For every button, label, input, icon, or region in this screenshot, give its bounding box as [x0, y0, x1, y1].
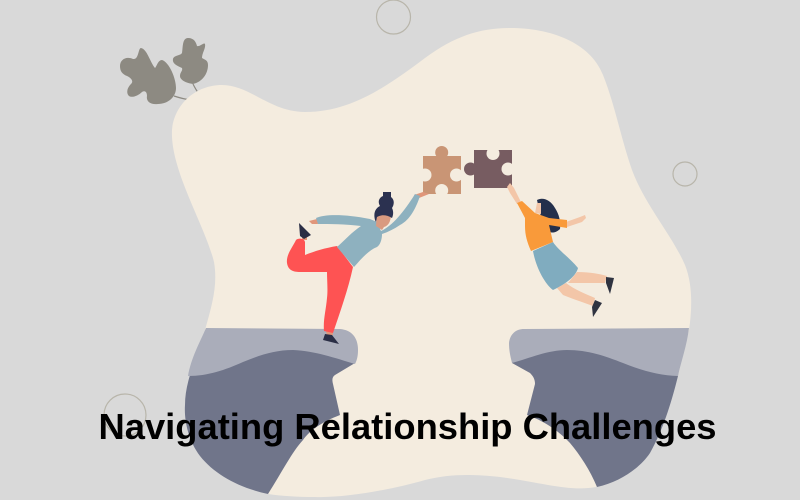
- figure: woman balancing on left cliff: [287, 192, 429, 344]
- pants: [287, 239, 353, 333]
- left cliff: [185, 328, 358, 494]
- shoe: standing foot: [323, 334, 339, 344]
- shirt: [316, 194, 420, 267]
- hair: [537, 199, 560, 233]
- legs skin: [557, 272, 607, 306]
- orange top: [517, 201, 567, 251]
- face: [535, 203, 541, 214]
- background blob: [172, 28, 691, 497]
- circle outline: bottom left: [104, 394, 146, 436]
- hand and arm skin: [302, 192, 429, 335]
- puzzle piece: tan: [418, 146, 463, 197]
- arms skin: [507, 183, 586, 227]
- shoes: [592, 277, 614, 317]
- skirt: [533, 242, 578, 290]
- figure: woman flying on right: [507, 183, 614, 317]
- circle outline: top: [376, 0, 410, 34]
- right cliff: [509, 328, 689, 487]
- hair and bun: [374, 192, 394, 222]
- left cliff dark rock: [185, 345, 355, 494]
- icon: leaves: [120, 38, 208, 104]
- circle outline: right: [673, 162, 697, 186]
- right cliff dark rock: [512, 345, 680, 487]
- title: Navigating Relationship Challenges: [98, 406, 716, 447]
- right cliff light top: [509, 328, 689, 376]
- puzzle piece: brown: [464, 147, 514, 188]
- shoe: raised foot: [299, 223, 311, 239]
- face: [376, 214, 391, 230]
- left cliff light top: [188, 328, 358, 376]
